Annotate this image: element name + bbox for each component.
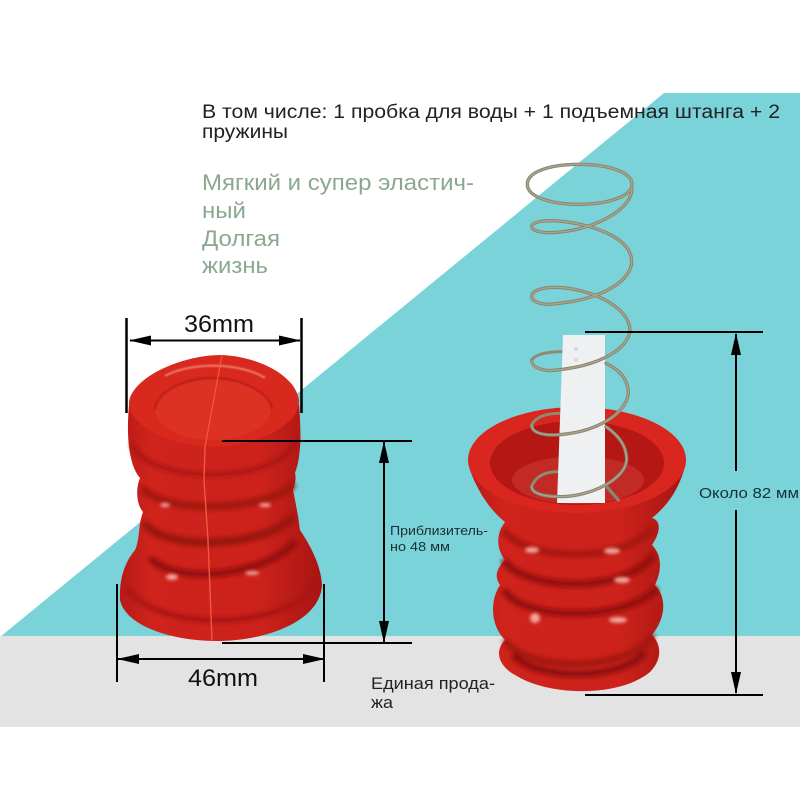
- plug body silhouette: [470, 470, 684, 691]
- label: sold individually: жа: [371, 693, 394, 712]
- plug body highlights: [525, 547, 630, 623]
- text block: product benefits: [202, 170, 474, 278]
- plug silhouette: [120, 405, 322, 641]
- plug seam: [204, 447, 212, 640]
- spring: [527, 164, 632, 500]
- dimension: 46mm base diameter: [117, 584, 324, 692]
- plug open rim: [468, 407, 686, 513]
- heading: contents of the set: пружины: [202, 122, 288, 143]
- label: sold individually: [371, 674, 495, 712]
- background: teal diagonal panel: [0, 93, 800, 637]
- background: grey floor band: [0, 636, 800, 727]
- dimension: 46mm base diameter: 46mm: [188, 665, 258, 692]
- heading: contents of the set: В том числе: 1 пробка для воды + 1 подъемная штанга + 2: [202, 102, 780, 123]
- dimension: 82 mm total height: Около 82 мм: [699, 485, 799, 502]
- product: spring and lifting rod in open plug: [468, 164, 686, 691]
- plug top cap inner disc: [155, 378, 271, 440]
- text block: product benefits: ный: [202, 198, 246, 223]
- plug highlights: [160, 503, 271, 580]
- dimension: 36mm top diameter: 36mm: [184, 311, 254, 338]
- lifting rod: [557, 335, 605, 503]
- text block: product benefits: жизнь: [202, 253, 268, 278]
- dimension: 48 mm plug height: но 48 мм: [390, 540, 450, 554]
- plug shadows and ring lines: [128, 440, 316, 620]
- dimension: 82 mm total height: [585, 332, 799, 695]
- text block: product benefits: Долгая: [202, 226, 280, 251]
- heading: contents of the set: [202, 102, 780, 143]
- rod holes: [574, 347, 578, 362]
- spring rear segments: [532, 352, 563, 487]
- plug inner cavity: [490, 421, 664, 505]
- dimension: 48 mm plug height: Приблизитель-: [390, 524, 488, 538]
- dimension: 48 mm plug height: [222, 441, 488, 643]
- plug top cap: [129, 355, 299, 447]
- plug body shadows: [505, 530, 655, 674]
- text block: product benefits: Мягкий и супер эластич-: [202, 170, 474, 195]
- dimension: 36mm top diameter: [126, 311, 302, 413]
- product: red plug, closed end up: [120, 355, 322, 641]
- label: sold individually: Единая прода-: [371, 674, 495, 693]
